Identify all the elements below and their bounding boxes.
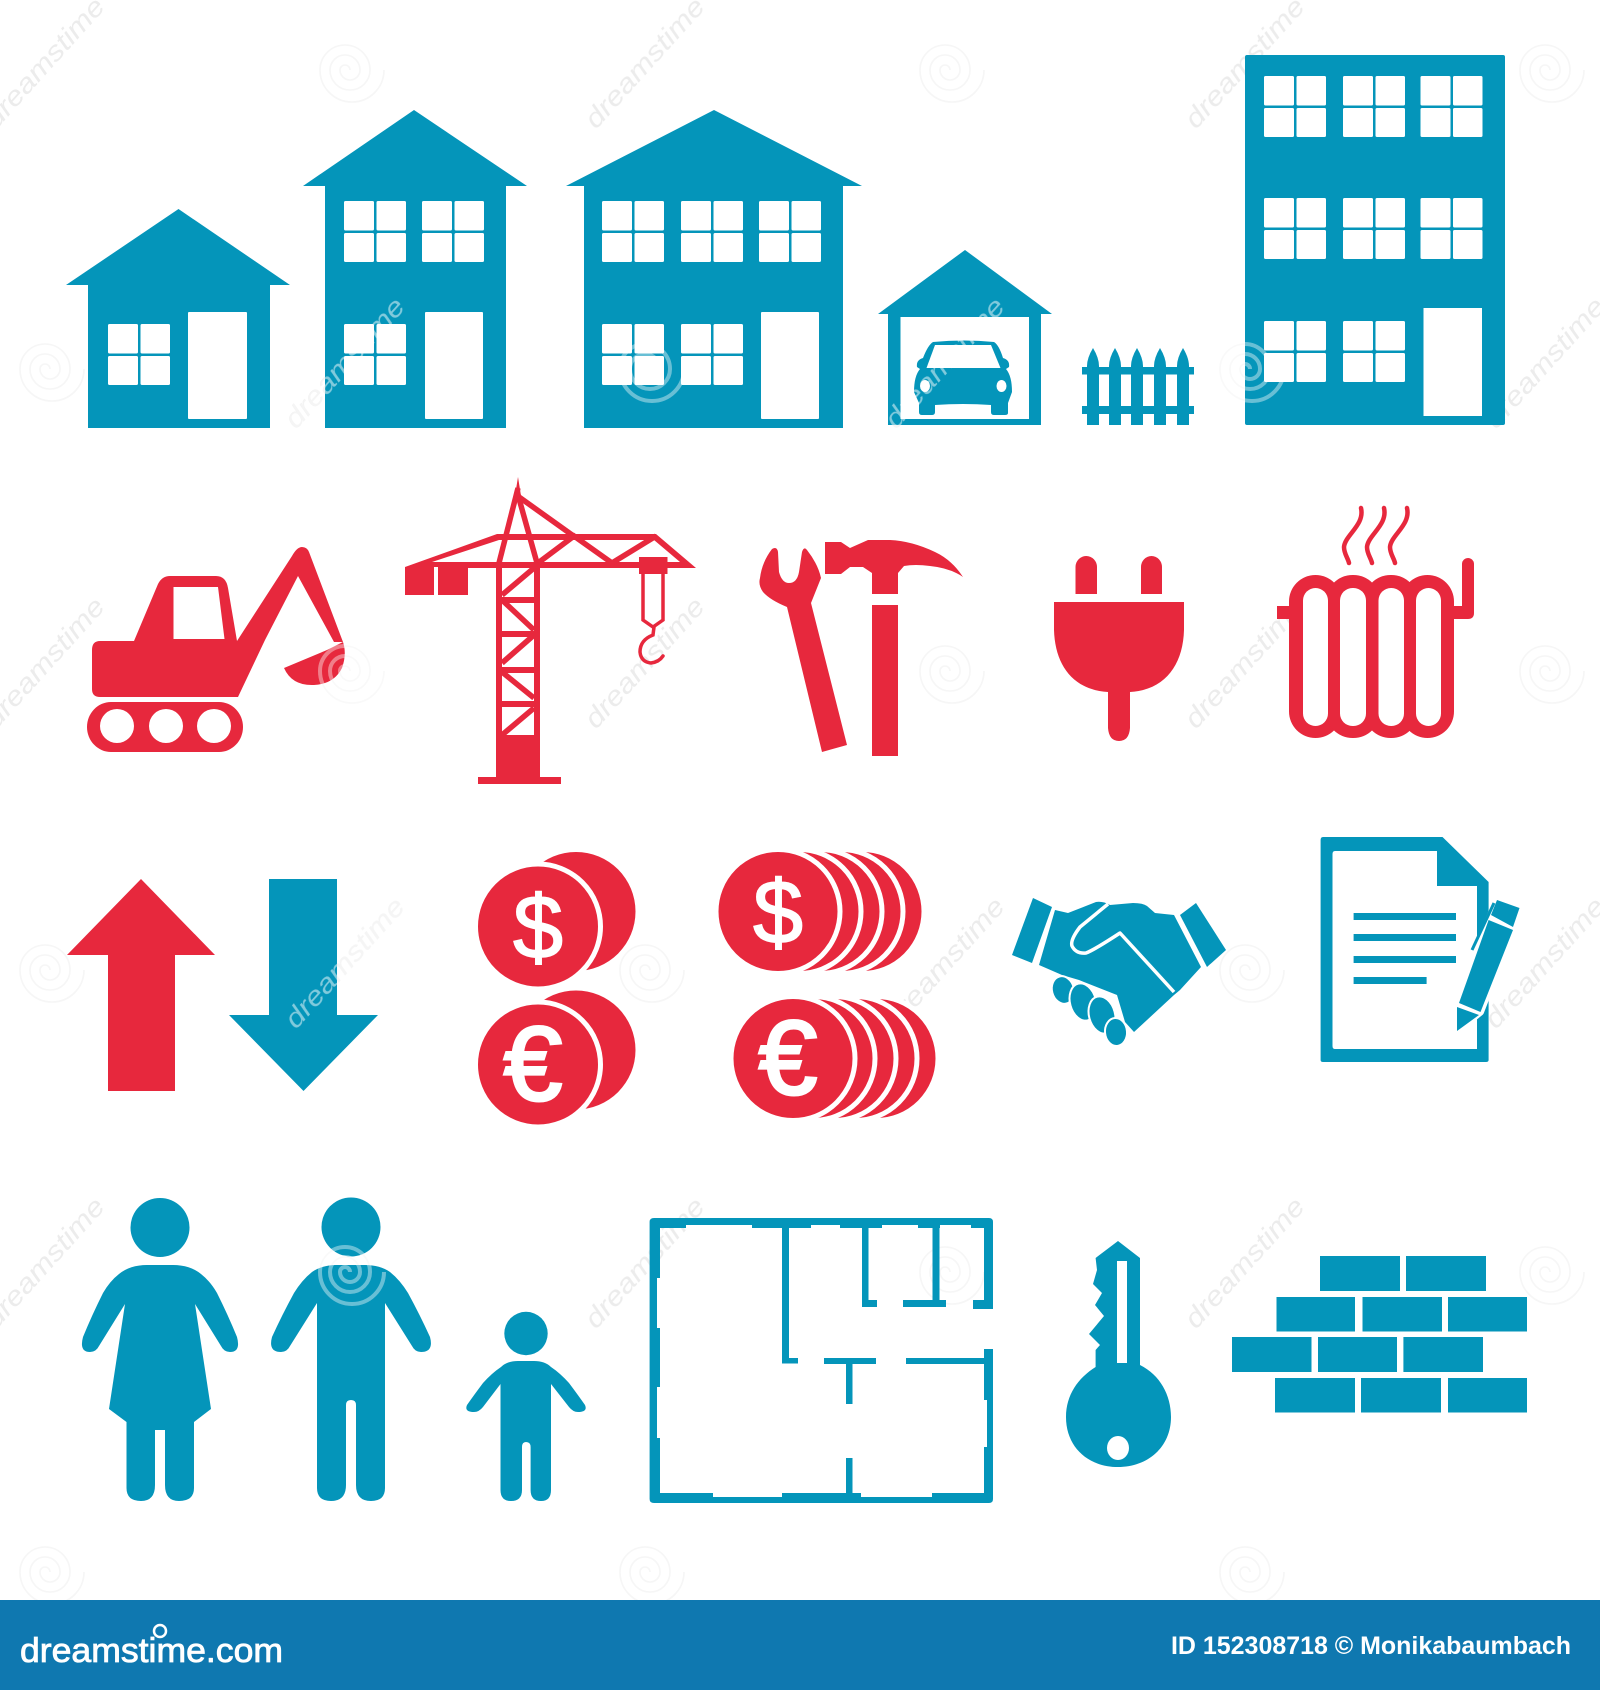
watermark text over icons: dreamstime	[278, 891, 411, 1034]
text: dreamstime	[878, 291, 1011, 434]
footer bar	[0, 1600, 1600, 1690]
text: dreamstime	[1178, 1191, 1311, 1334]
icon: fence	[1082, 348, 1194, 425]
watermark text over icons: dreamstime	[878, 291, 1011, 434]
icon: tower crane	[405, 477, 696, 784]
text: dreamstime	[578, 1191, 711, 1334]
icon: euro coins	[476, 990, 636, 1127]
text: dreamstime	[578, 591, 711, 734]
icon: dollar coin stack: $	[753, 863, 803, 963]
icon: brick wall	[1232, 1256, 1527, 1412]
icon: garage with car	[878, 250, 1052, 425]
icon: dollar coins: $	[513, 878, 563, 978]
footer logo swirl	[154, 1625, 166, 1637]
icon: radiator with heat	[1277, 508, 1474, 738]
icon: man	[271, 1198, 431, 1501]
icon: euro coins: €	[504, 1006, 562, 1123]
icon: contract and pen	[1321, 837, 1520, 1062]
icon: child	[466, 1312, 586, 1501]
icon: electric plug	[1054, 556, 1184, 741]
footer credit: ID 152308718 © Monikabaumbach	[1171, 1632, 1571, 1660]
icon: dollar coins	[476, 852, 636, 989]
icon: key	[1066, 1241, 1171, 1467]
icon: euro coin stack: €	[759, 1000, 817, 1117]
icon: euro coin stack	[731, 996, 938, 1120]
icon: handshake	[1012, 898, 1226, 1047]
text: dreamstime	[1478, 891, 1600, 1034]
arrow: up	[67, 879, 215, 1091]
icon: apartment building	[1245, 55, 1505, 425]
arrow: down	[229, 879, 378, 1091]
text: dreamstime	[578, 0, 711, 134]
icon: two storey house	[303, 110, 527, 428]
icon: floor plan	[650, 1218, 993, 1503]
icon: excavator	[87, 547, 345, 752]
footer logo text: dreamstime.com	[20, 1632, 283, 1670]
watermark text over icons: dreamstime	[278, 291, 411, 434]
text: dreamstime	[1178, 0, 1311, 134]
icon: wide two storey house	[566, 110, 862, 428]
text: dreamstime	[878, 891, 1011, 1034]
icon: wrench and hammer	[759, 540, 963, 756]
text: dreamstime	[278, 891, 411, 1034]
icon: woman	[82, 1198, 238, 1501]
watermark text over icons	[278, 291, 1011, 1034]
text: dreamstime	[1178, 591, 1311, 734]
text: dreamstime	[1478, 291, 1600, 434]
text: dreamstime	[278, 291, 411, 434]
icon: dollar coin stack	[716, 850, 924, 974]
icon: small house	[66, 209, 290, 428]
